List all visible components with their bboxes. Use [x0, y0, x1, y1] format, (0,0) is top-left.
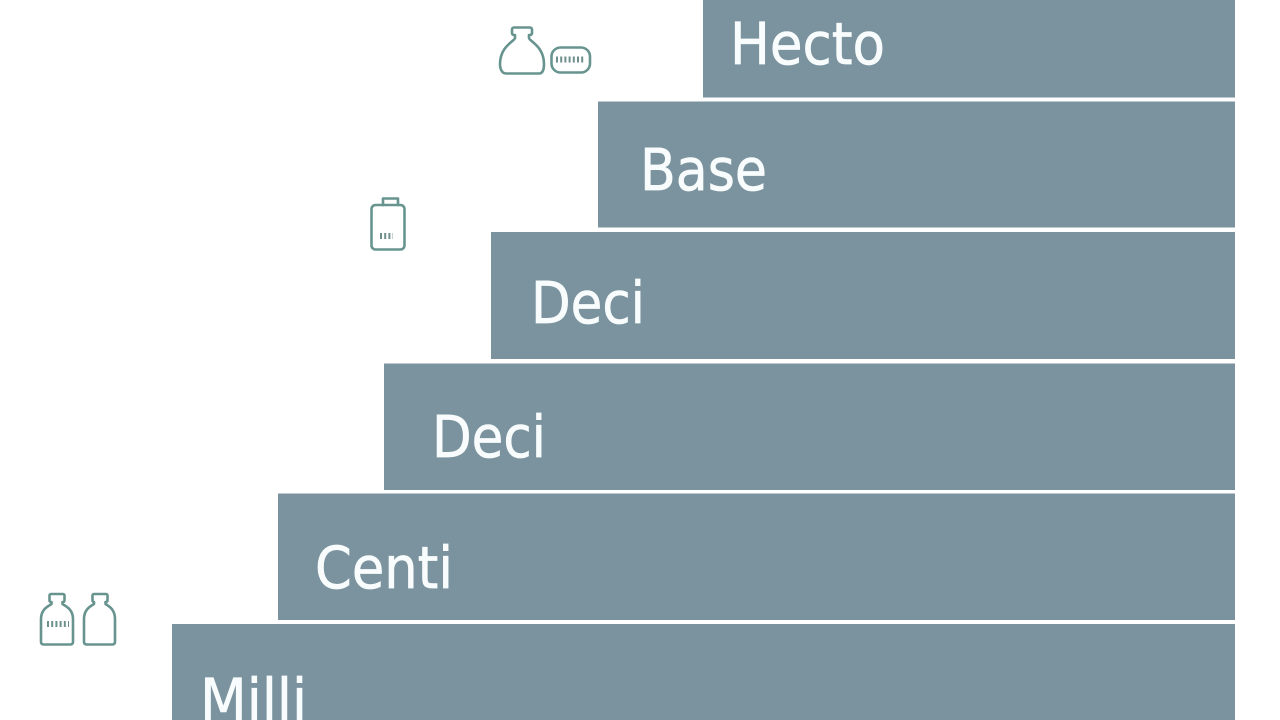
- step: Deci upper: [491, 232, 1235, 359]
- step: Deci lower: [384, 364, 1235, 490]
- step: Centi: Centi: [315, 534, 453, 602]
- step: Hecto: Hecto: [730, 10, 885, 78]
- step: Milli: [172, 624, 1235, 720]
- step: Centi: [278, 494, 1235, 620]
- step: Deci upper: Deci: [531, 269, 645, 337]
- step: Base: Base: [640, 136, 767, 204]
- step: Hecto: [703, 0, 1235, 98]
- icon: two bottles: [41, 594, 115, 644]
- icon: bottle with label: [372, 198, 404, 250]
- step: Base: [598, 102, 1235, 228]
- step: Deci lower: Deci: [432, 403, 546, 471]
- icon: flask and measuring tape: [500, 28, 590, 74]
